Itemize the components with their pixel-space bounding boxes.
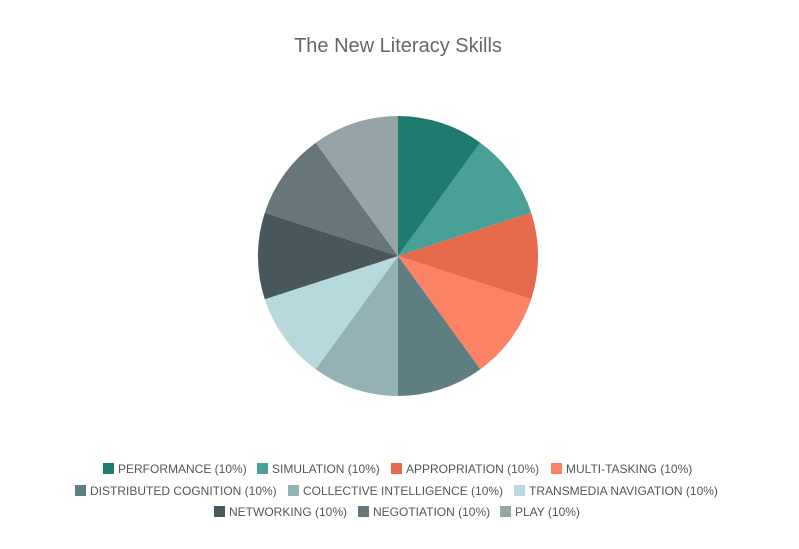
legend: PLAY (10%) <box>515 505 580 519</box>
title: The New Literacy Skills <box>294 35 502 57</box>
legend <box>75 462 718 519</box>
legend: NETWORKING (10%) <box>229 505 347 519</box>
legend: MULTI-TASKING (10%) <box>566 462 692 476</box>
legend: TRANSMEDIA NAVIGATION (10%) <box>529 484 718 498</box>
legend: COLLECTIVE INTELLIGENCE (10%) <box>303 484 503 498</box>
legend: APPROPRIATION (10%) <box>406 462 539 476</box>
pie chart <box>258 116 538 396</box>
legend: PERFORMANCE (10%) <box>118 462 247 476</box>
legend: NEGOTIATION (10%) <box>373 505 490 519</box>
legend: SIMULATION (10%) <box>272 462 380 476</box>
legend: DISTRIBUTED COGNITION (10%) <box>90 484 277 498</box>
